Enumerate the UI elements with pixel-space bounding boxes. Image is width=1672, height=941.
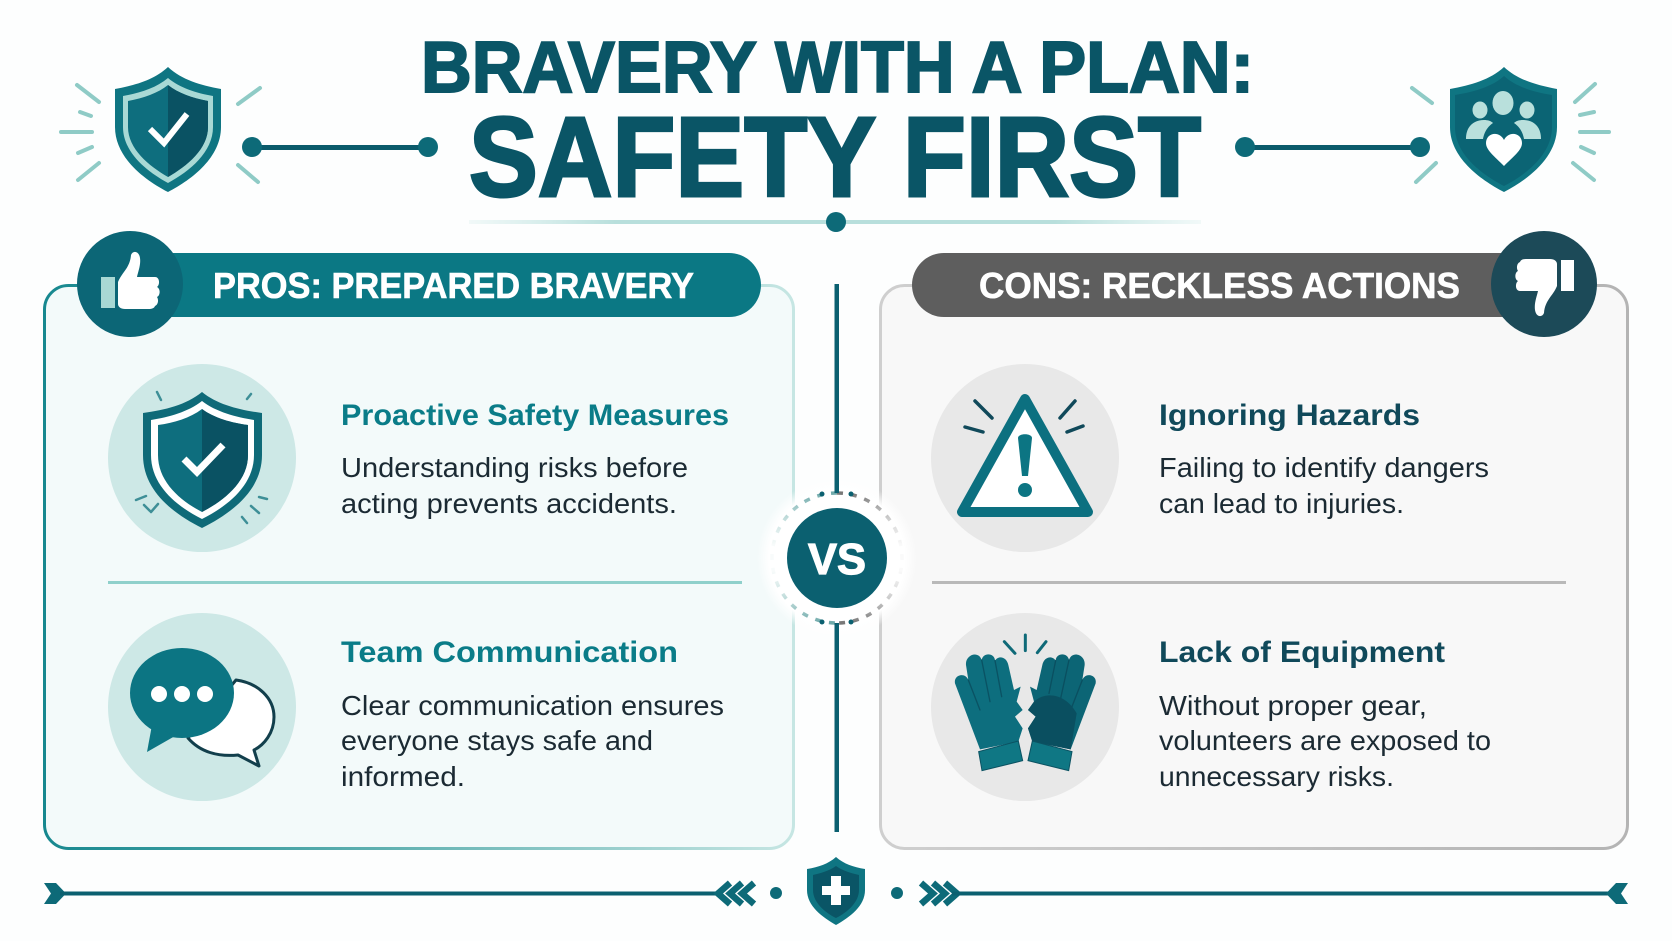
- description: everyone stays safe and: [341, 725, 653, 756]
- pros header banner: [77, 231, 761, 337]
- heading: Team Communication: [341, 636, 678, 669]
- title: [421, 28, 1254, 220]
- right header connector: [1235, 137, 1430, 157]
- icon: speech bubbles: [130, 648, 274, 766]
- description: [341, 690, 724, 792]
- cons header label: CONS: RECKLESS ACTIONS: [979, 265, 1460, 306]
- heading: Ignoring Hazards: [1159, 399, 1420, 432]
- description: acting prevents accidents.: [341, 488, 677, 519]
- divider: pros: [108, 581, 742, 584]
- divider: cons: [932, 581, 1566, 584]
- icon: warning triangle: [962, 399, 1088, 512]
- icon: thumbs down: [1515, 259, 1574, 316]
- description: Failing to identify dangers: [1159, 452, 1489, 483]
- footer icon: medical shield: [807, 857, 865, 925]
- pros header label: PROS: PREPARED BRAVERY: [213, 265, 694, 306]
- title: BRAVERY WITH A PLAN:: [421, 28, 1254, 108]
- description: unnecessary risks.: [1159, 761, 1394, 792]
- footer divider right: [891, 883, 1628, 904]
- description: [1159, 452, 1489, 519]
- heading: Lack of Equipment: [1159, 636, 1445, 669]
- description: can lead to injuries.: [1159, 488, 1404, 519]
- description: [341, 452, 688, 519]
- vs badge: VS: [808, 535, 866, 584]
- footer divider left: [44, 883, 782, 904]
- icon: shield with check: [136, 392, 267, 528]
- item: ignoring hazards: [931, 364, 1489, 552]
- heading: Proactive Safety Measures: [341, 399, 729, 432]
- description: Clear communication ensures: [341, 690, 724, 721]
- description: volunteers are exposed to: [1159, 725, 1491, 756]
- description: Understanding risks before: [341, 452, 688, 483]
- description: informed.: [341, 761, 465, 792]
- item: proactive safety measures: [108, 364, 729, 552]
- center divider: [834, 284, 839, 832]
- panel: cons: [880, 231, 1628, 848]
- icon: header shield with family and heart: [1412, 67, 1609, 192]
- icon: torn gloves: [955, 635, 1096, 771]
- description: Without proper gear,: [1159, 690, 1427, 721]
- left header connector: [242, 137, 438, 157]
- item: team communication: [108, 613, 724, 801]
- description: [1159, 690, 1491, 792]
- icon: thumbs up: [101, 252, 160, 309]
- vs badge: [757, 478, 917, 638]
- title underline: [469, 212, 1201, 232]
- panel: pros: [44, 231, 794, 848]
- title: SAFETY FIRST: [469, 94, 1201, 220]
- item: lack of equipment: [931, 613, 1491, 801]
- icon: header shield with check: [61, 67, 260, 192]
- cons header banner: [912, 231, 1597, 337]
